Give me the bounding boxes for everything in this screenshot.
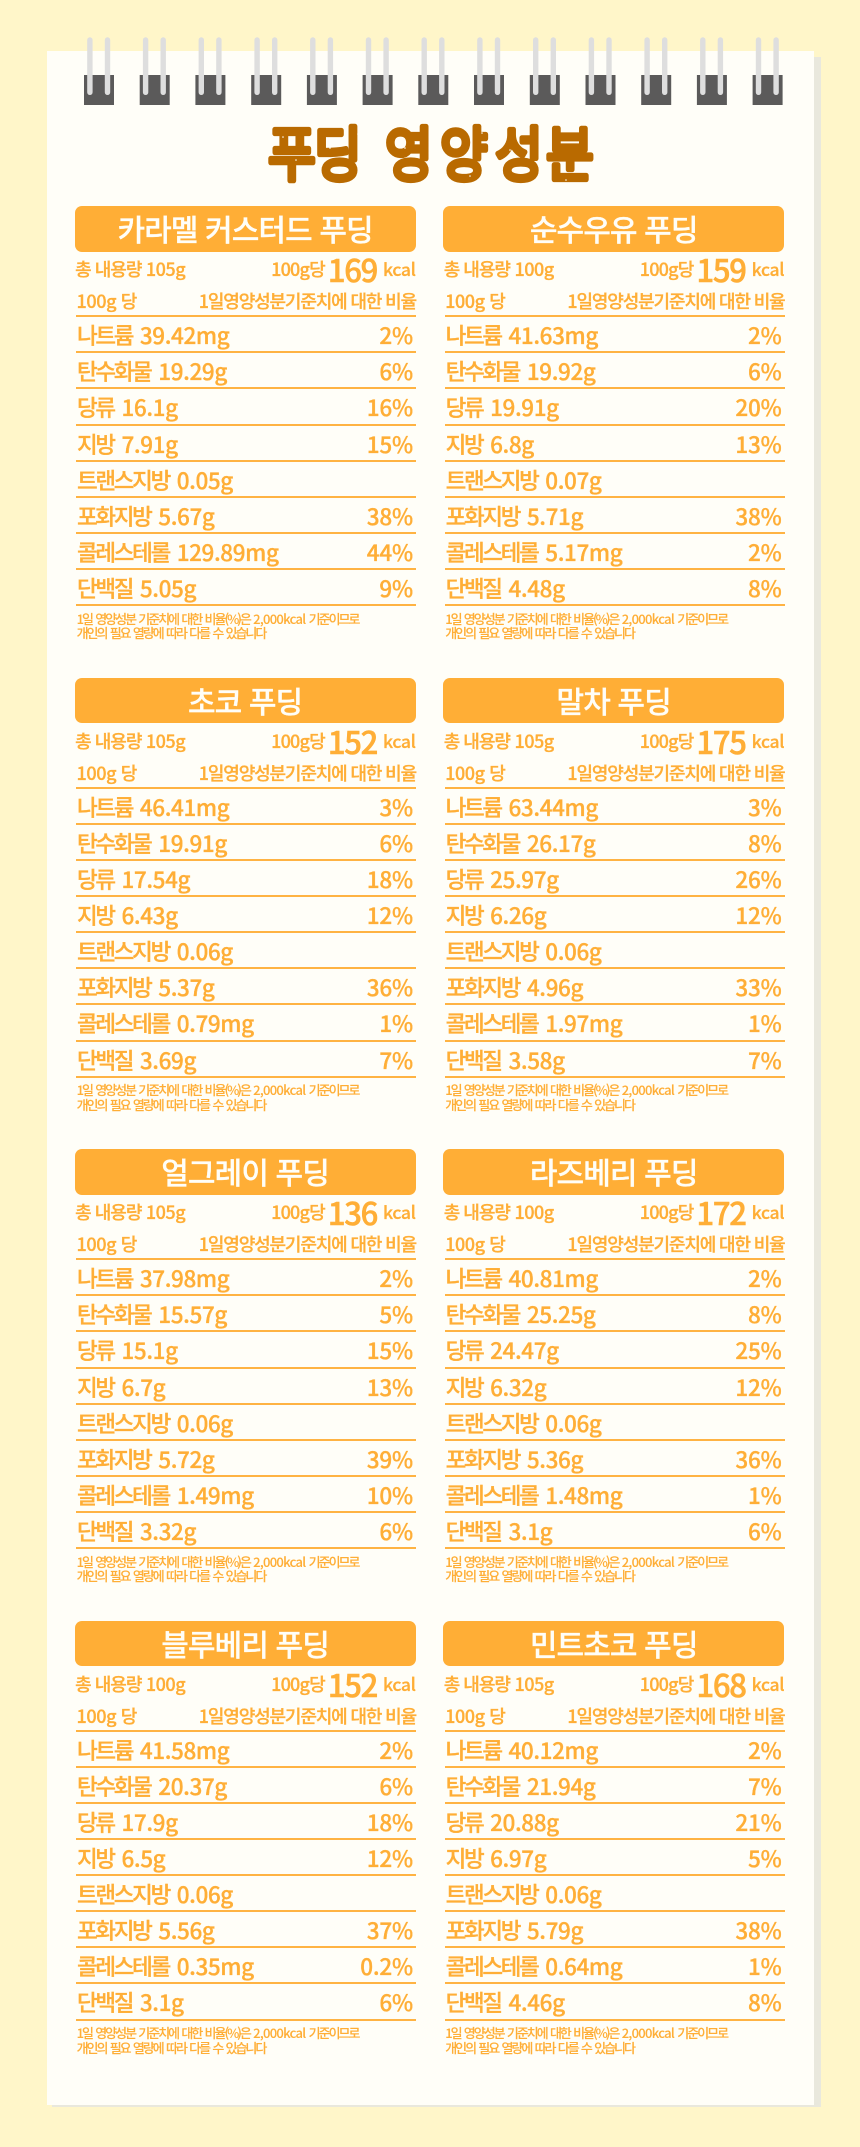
total content and calories: 100g당152 kcal [271, 1661, 416, 1706]
nutrient table: 13% [367, 1371, 413, 1403]
total content and calories [75, 246, 416, 291]
total content and calories: 100g당175 kcal [640, 718, 784, 763]
total content and calories [444, 1189, 784, 1234]
total content and calories [75, 1661, 416, 1706]
nutrient table: 13% [735, 428, 782, 460]
nutrient table: 탄수화물 19.91g [77, 827, 227, 859]
nutrient table: 18% [367, 863, 413, 895]
nutrient table [445, 315, 785, 606]
footnote: 개인의 필요 열량에 따라 다를 수 있습니다 [445, 1095, 634, 1114]
nutrient table: 포화지방 5.56g [77, 1914, 214, 1946]
table column headings: 1일영양성분기준치에 대한 비율 [199, 1703, 416, 1729]
footnote: 개인의 필요 열량에 따라 다를 수 있습니다 [77, 1566, 265, 1585]
nutrient table: 20% [735, 391, 782, 423]
heading [443, 678, 784, 723]
nutrient table: 지방 6.97g [446, 1842, 546, 1874]
nutrient table: 당류 17.9g [77, 1806, 178, 1838]
nutrient table: 6% [379, 827, 413, 859]
footnote: 1일 영양성분 기준치에 대한 비율(%)은 2,000kcal 기준이므로 [77, 1080, 358, 1099]
nutrient table: 7% [379, 1044, 413, 1076]
nutrient table: 5% [379, 1298, 413, 1330]
nutrient table: 2% [379, 319, 413, 351]
nutrient table: 26% [735, 863, 782, 895]
nutrient table: 트랜스지방 0.06g [446, 935, 602, 967]
heading: 초코 푸딩 [188, 678, 302, 722]
nutrient table: 2% [748, 536, 782, 568]
nutrient table: 18% [367, 1806, 413, 1838]
panel: soy milk pudding [443, 206, 785, 642]
panel: blueberry pudding [75, 1621, 416, 2057]
nutrient table: 포화지방 5.79g [446, 1914, 583, 1946]
footnote: 개인의 필요 열량에 따라 다를 수 있습니다 [445, 2038, 634, 2057]
nutrient table: 탄수화물 26.17g [446, 827, 596, 859]
nutrient table: 탄수화물 21.94g [446, 1770, 596, 1802]
nutrient table: 나트륨 63.44mg [446, 791, 598, 823]
table column headings [76, 1703, 416, 1729]
footnote [445, 1080, 729, 1114]
table column headings: 100g 당 [76, 760, 137, 786]
nutrient table: 단백질 4.46g [446, 1986, 565, 2018]
heading [75, 1621, 416, 1666]
nutrient table: 12% [367, 899, 413, 931]
nutrient table: 38% [735, 1914, 782, 1946]
nutrient table: 8% [748, 1986, 782, 2018]
table column headings: 100g 당 [76, 1231, 137, 1257]
nutrient table: 단백질 5.05g [77, 572, 196, 604]
nutrient table: 7% [748, 1044, 782, 1076]
nutrient table: 당류 17.54g [77, 863, 190, 895]
heading [443, 1149, 784, 1195]
nutrient table: 트랜스지방 0.06g [77, 1407, 233, 1439]
table column headings: 100g 당 [445, 1231, 505, 1257]
nutrient table: 2% [748, 319, 782, 351]
nutrient table: 포화지방 5.36g [446, 1443, 583, 1475]
panel: raspberry pudding [443, 1149, 785, 1585]
total content and calories: 총 내용량 105g [444, 1671, 554, 1697]
table column headings [445, 1231, 785, 1257]
nutrient table: 37% [367, 1914, 413, 1946]
nutrient table: 포화지방 5.37g [77, 971, 214, 1003]
table column headings: 1일영양성분기준치에 대한 비율 [567, 1703, 785, 1729]
nutrient table: 38% [735, 500, 782, 532]
footnote: 1일 영양성분 기준치에 대한 비율(%)은 2,000kcal 기준이므로 [77, 1552, 358, 1571]
heading: 민트초코 푸딩 [530, 1621, 698, 1665]
nutrient table: 1% [748, 1479, 782, 1511]
nutrient table: 탄수화물 25.25g [446, 1298, 596, 1330]
heading: 순수우유 푸딩 [530, 206, 698, 250]
nutrient table: 2% [748, 1734, 782, 1766]
table column headings [445, 288, 785, 314]
nutrient table: 지방 6.43g [77, 899, 178, 931]
nutrient table: 21% [735, 1806, 782, 1838]
nutrient table: 15% [367, 428, 413, 460]
nutrient table: 단백질 3.1g [446, 1515, 552, 1547]
total content and calories: 100g당136 kcal [271, 1189, 416, 1234]
table column headings [76, 760, 416, 786]
heading: 얼그레이 푸딩 [161, 1149, 329, 1193]
nutrient table: 단백질 3.69g [77, 1044, 196, 1076]
table column headings: 100g 당 [76, 1703, 137, 1729]
nutrient table [76, 1258, 416, 1549]
nutrient table [76, 315, 416, 606]
table column headings [445, 760, 785, 786]
nutrient table: 3% [379, 791, 413, 823]
table column headings: 1일영양성분기준치에 대한 비율 [199, 760, 416, 786]
nutrient table: 1% [748, 1950, 782, 1982]
nutrient table: 콜레스테롤 1.97mg [446, 1007, 622, 1039]
total content and calories [75, 718, 416, 763]
title: 푸딩 영양성분 [268, 108, 594, 194]
nutrient table: 당류 19.91g [446, 391, 559, 423]
nutrient table: 나트륨 39.42mg [77, 319, 229, 351]
table column headings [76, 1231, 416, 1257]
nutrient table: 포화지방 5.71g [446, 500, 583, 532]
nutrient table: 단백질 3.58g [446, 1044, 565, 1076]
total content and calories: 총 내용량 105g [75, 728, 185, 754]
heading: 말차 푸딩 [557, 678, 671, 722]
panel: caramel custard pudding [75, 206, 416, 642]
table column headings: 100g 당 [445, 288, 505, 314]
nutrient table: 트랜스지방 0.06g [446, 1407, 602, 1439]
footnote [77, 2023, 360, 2057]
table column headings: 100g 당 [445, 760, 505, 786]
table column headings [445, 1703, 785, 1729]
nutrient table: 33% [735, 971, 782, 1003]
nutrient table: 10% [367, 1479, 413, 1511]
nutrient table: 지방 6.5g [77, 1842, 165, 1874]
nutrient table: 콜레스테롤 0.35mg [77, 1950, 254, 1982]
nutrient table: 나트륨 46.41mg [77, 791, 229, 823]
panel: earl grey pudding [75, 1149, 416, 1585]
total content and calories: 총 내용량 100g [75, 1671, 185, 1697]
nutrient table: 단백질 3.32g [77, 1515, 196, 1547]
nutrient table: 콜레스테롤 0.64mg [446, 1950, 622, 1982]
table column headings: 100g 당 [445, 1703, 505, 1729]
footnote: 개인의 필요 열량에 따라 다를 수 있습니다 [445, 1566, 634, 1585]
table column headings: 1일영양성분기준치에 대한 비율 [567, 1231, 785, 1257]
total content and calories: 100g당172 kcal [640, 1189, 784, 1234]
nutrient table: 0.2% [360, 1950, 413, 1982]
total content and calories [444, 246, 784, 291]
nutrient table: 나트륨 40.12mg [446, 1734, 598, 1766]
nutrient table: 15% [367, 1334, 413, 1366]
nutrient table: 트랜스지방 0.05g [77, 464, 233, 496]
nutrient table: 나트륨 41.63mg [446, 319, 598, 351]
total content and calories: 총 내용량 105g [75, 256, 185, 282]
nutrient table: 12% [735, 1371, 782, 1403]
nutrient table: 당류 24.47g [446, 1334, 559, 1366]
nutrient table [445, 787, 785, 1078]
nutrient table: 25% [735, 1334, 782, 1366]
nutrient table: 1% [748, 1007, 782, 1039]
nutrient table: 44% [367, 536, 413, 568]
nutrient table: 8% [748, 572, 782, 604]
nutrient table: 6% [379, 355, 413, 387]
nutrient table [445, 1258, 785, 1549]
nutrient table: 7% [748, 1770, 782, 1802]
heading [75, 678, 416, 723]
nutrient table: 탄수화물 15.57g [77, 1298, 227, 1330]
nutrient table: 1% [379, 1007, 413, 1039]
total content and calories [75, 1189, 416, 1234]
footnote: 1일 영양성분 기준치에 대한 비율(%)은 2,000kcal 기준이므로 [445, 2023, 727, 2042]
heading: 블루베리 푸딩 [161, 1621, 329, 1665]
nutrient table: 트랜스지방 0.06g [77, 935, 233, 967]
total content and calories [444, 718, 784, 763]
nutrient table: 6% [748, 355, 782, 387]
total content and calories: 100g당168 kcal [640, 1661, 784, 1706]
nutrient table: 2% [379, 1734, 413, 1766]
nutrient table: 포화지방 5.67g [77, 500, 214, 532]
footnote [445, 1552, 729, 1585]
nutrient table [76, 787, 416, 1078]
total content and calories: 총 내용량 100g [444, 1199, 554, 1225]
nutrient table: 5% [748, 1842, 782, 1874]
nutrient table: 트랜스지방 0.06g [77, 1878, 233, 1910]
total content and calories: 총 내용량 105g [75, 1199, 185, 1225]
heading: 라즈베리 푸딩 [530, 1149, 698, 1193]
nutrient table: 지방 6.32g [446, 1371, 546, 1403]
nutrient table: 당류 25.97g [446, 863, 559, 895]
total content and calories: 100g당152 kcal [271, 718, 416, 763]
nutrient table [445, 1730, 785, 2021]
nutrient table: 9% [379, 572, 413, 604]
nutrient table: 38% [367, 500, 413, 532]
nutrient table: 나트륨 40.81mg [446, 1262, 598, 1294]
nutrient table: 지방 6.7g [77, 1371, 165, 1403]
nutrient table: 2% [748, 1262, 782, 1294]
heading [443, 1621, 784, 1666]
nutrient table: 탄수화물 19.29g [77, 355, 227, 387]
panel: mint chocolate pudding [443, 1621, 785, 2057]
nutrient table: 6% [379, 1986, 413, 2018]
nutrient table: 포화지방 5.72g [77, 1443, 214, 1475]
nutrient table: 트랜스지방 0.06g [446, 1878, 602, 1910]
nutrient table: 12% [367, 1842, 413, 1874]
nutrient table: 3% [748, 791, 782, 823]
panel: matcha pudding [443, 678, 785, 1114]
table column headings [76, 288, 416, 314]
nutrient table: 6% [379, 1770, 413, 1802]
footnote: 1일 영양성분 기준치에 대한 비율(%)은 2,000kcal 기준이므로 [77, 609, 358, 628]
nutrient table: 지방 7.91g [77, 428, 178, 460]
nutrient table: 8% [748, 827, 782, 859]
total content and calories: 100g당169 kcal [271, 246, 416, 291]
table column headings: 1일영양성분기준치에 대한 비율 [199, 1231, 416, 1257]
nutrient table: 탄수화물 19.92g [446, 355, 596, 387]
total content and calories: 100g당159 kcal [640, 246, 784, 291]
footnote [77, 609, 360, 642]
nutrient table: 나트륨 41.58mg [77, 1734, 229, 1766]
footnote [445, 2023, 729, 2057]
footnote [77, 1552, 360, 1585]
nutrient table: 6% [748, 1515, 782, 1547]
nutrient table: 콜레스테롤 129.89mg [77, 536, 279, 568]
nutrient table: 포화지방 4.96g [446, 971, 583, 1003]
footnote [77, 1080, 360, 1114]
nutrient table: 단백질 4.48g [446, 572, 565, 604]
footnote: 개인의 필요 열량에 따라 다를 수 있습니다 [445, 623, 634, 642]
heading [75, 1149, 416, 1195]
heading: 카라멜 커스터드 푸딩 [117, 206, 373, 250]
nutrient table: 8% [748, 1298, 782, 1330]
table column headings: 100g 당 [76, 288, 137, 314]
nutrient table: 콜레스테롤 5.17mg [446, 536, 622, 568]
heading [443, 206, 784, 252]
nutrient table: 당류 20.88g [446, 1806, 559, 1838]
total content and calories [444, 1661, 784, 1706]
total content and calories: 총 내용량 100g [444, 256, 554, 282]
nutrient table: 지방 6.26g [446, 899, 546, 931]
footnote: 1일 영양성분 기준치에 대한 비율(%)은 2,000kcal 기준이므로 [445, 1552, 727, 1571]
nutrient table: 트랜스지방 0.07g [446, 464, 602, 496]
nutrient table: 36% [735, 1443, 782, 1475]
total content and calories: 총 내용량 105g [444, 728, 554, 754]
footnote: 개인의 필요 열량에 따라 다를 수 있습니다 [77, 1095, 265, 1114]
footnote [445, 609, 729, 642]
footnote: 1일 영양성분 기준치에 대한 비율(%)은 2,000kcal 기준이므로 [445, 609, 727, 628]
nutrient table: 단백질 3.1g [77, 1986, 184, 2018]
footnote: 개인의 필요 열량에 따라 다를 수 있습니다 [77, 623, 265, 642]
nutrient table: 탄수화물 20.37g [77, 1770, 227, 1802]
nutrient table: 나트륨 37.98mg [77, 1262, 229, 1294]
nutrient table [76, 1730, 416, 2021]
nutrient table: 2% [379, 1262, 413, 1294]
table column headings: 1일영양성분기준치에 대한 비율 [567, 760, 785, 786]
nutrient table: 당류 16.1g [77, 391, 178, 423]
nutrient table: 당류 15.1g [77, 1334, 178, 1366]
nutrient table: 36% [367, 971, 413, 1003]
panel: chocolate pudding [75, 678, 416, 1114]
nutrient table: 39% [367, 1443, 413, 1475]
nutrient table: 6% [379, 1515, 413, 1547]
nutrient table: 콜레스테롤 1.49mg [77, 1479, 254, 1511]
nutrient table: 콜레스테롤 0.79mg [77, 1007, 254, 1039]
nutrient table: 지방 6.8g [446, 428, 534, 460]
nutrient table: 콜레스테롤 1.48mg [446, 1479, 622, 1511]
nutrient table: 16% [367, 391, 413, 423]
icon: spiral notebook binding [84, 37, 783, 105]
footnote: 개인의 필요 열량에 따라 다를 수 있습니다 [77, 2038, 265, 2057]
table column headings: 1일영양성분기준치에 대한 비율 [199, 288, 416, 314]
nutrient table: 12% [735, 899, 782, 931]
footnote: 1일 영양성분 기준치에 대한 비율(%)은 2,000kcal 기준이므로 [445, 1080, 727, 1099]
footnote: 1일 영양성분 기준치에 대한 비율(%)은 2,000kcal 기준이므로 [77, 2023, 358, 2042]
table column headings: 1일영양성분기준치에 대한 비율 [567, 288, 785, 314]
